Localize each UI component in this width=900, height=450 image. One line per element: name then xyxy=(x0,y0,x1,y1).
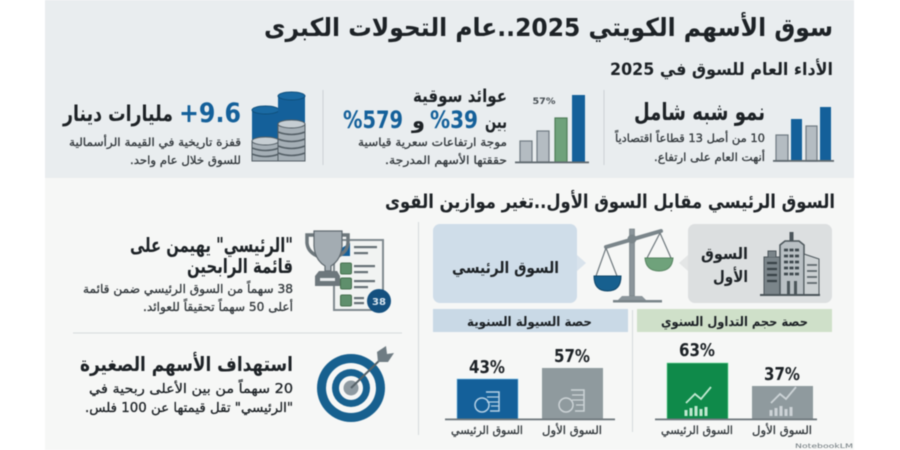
panel: main market box xyxy=(433,224,586,303)
text: winners description xyxy=(83,280,293,315)
text: winners description: 38 سهماً من السوق الرئيسي ضمن قائمة xyxy=(83,280,293,297)
panel: market cap gain xyxy=(62,92,305,168)
icon: buildings xyxy=(760,232,820,296)
text: small stocks description: "الرئيسي" تقل قيمتها عن 100 فلس. xyxy=(85,401,293,416)
text: market returns description: موجة ارتفاعات سعرية قياسية xyxy=(358,135,507,150)
figure: return range: %39 xyxy=(430,106,478,134)
label: main market: السوق الرئيسي xyxy=(451,423,523,438)
heading: main market dominates winners: "الرئيسي" يهيمن على xyxy=(130,233,293,258)
icon: trophy and checklist: 38 xyxy=(372,297,386,308)
icon: balance scale xyxy=(594,229,673,302)
bar: main market 43 percent: 43% xyxy=(469,357,505,378)
figure: 9.6 billion dinars xyxy=(62,98,241,129)
credit: NotebookLM: NotebookLM xyxy=(795,442,853,450)
label: first market: السوق الأول xyxy=(542,423,602,438)
figure: 9.6 billion dinars: مليارات دينار xyxy=(62,102,173,127)
title: سوق الأسهم الكويتي 2025..عام التحولات الكبرى xyxy=(264,12,833,43)
heading: near-total growth: نمو شبه شامل xyxy=(634,98,765,126)
text: market returns description: حققتها الأسهم المدرجة. xyxy=(385,153,507,168)
figure: return range xyxy=(343,106,507,134)
panel: near-total growth xyxy=(615,98,834,165)
text: market cap description: قفزة تاريخية في القيمة الرأسمالية xyxy=(69,134,241,150)
text: near-total growth description: أنهت العام على ارتفاع. xyxy=(654,149,765,165)
heading: market returns: عوائد سوقية xyxy=(413,86,507,107)
text: market returns description xyxy=(358,135,507,168)
heading: annual liquidity share xyxy=(433,309,628,332)
heading: annual trading volume share xyxy=(637,309,832,332)
text: near-total growth description xyxy=(615,129,765,165)
heading: main market dominates winners: قائمة الرابحين xyxy=(187,254,293,278)
panel: bottom comparison background xyxy=(45,178,854,450)
icon: growth bars xyxy=(773,107,834,162)
figure: 9.6 billion dinars: +9.6 xyxy=(179,98,241,129)
bar: first market 57 percent xyxy=(542,346,603,419)
label: main market: السوق الرئيسي xyxy=(452,258,559,278)
bar: first market 37 percent: 37% xyxy=(764,364,800,385)
figure: return range: و xyxy=(411,109,425,133)
panel: annual trading volume share xyxy=(637,309,832,438)
heading: overall performance: الأداء العام للسوق في 2025 xyxy=(610,59,833,80)
label: first market xyxy=(701,244,748,286)
text: near-total growth description: 10 من أصل 13 قطاعاً اقتصادياً xyxy=(615,129,765,146)
bar: first market 57 percent: 57% xyxy=(554,346,590,367)
panel: small stocks xyxy=(80,346,394,422)
bar: main market 43 percent xyxy=(457,357,518,419)
bar: first market 37 percent xyxy=(752,364,813,419)
figure: return range: %579 xyxy=(343,106,403,134)
text: market cap description: للسوق خلال عام واحد. xyxy=(130,153,241,168)
bar: main market 63 percent xyxy=(667,340,728,419)
panel: top overview background xyxy=(45,0,854,178)
heading: main market dominates winners xyxy=(130,233,293,278)
heading: targeting small stocks: استهداف الأسهم الصغيرة xyxy=(80,351,293,376)
panel: first market box xyxy=(679,224,832,303)
icon: target with arrow xyxy=(317,346,394,422)
figure: return range: بين xyxy=(485,111,507,133)
panel: winners list xyxy=(83,231,391,315)
text: small stocks description xyxy=(85,379,293,416)
icon: rising bars with 57 percent xyxy=(515,95,589,163)
heading: main versus first market: السوق الرئيسي مقابل السوق الأول..تغير موازين القوى xyxy=(385,190,835,213)
label: first market: السوق xyxy=(701,244,748,263)
icon: trophy and checklist xyxy=(307,231,391,313)
heading: annual liquidity share: حصة السيولة السنوية xyxy=(467,315,592,330)
text: market cap description xyxy=(69,134,241,168)
panel: market returns xyxy=(343,86,589,168)
icon: coin stacks xyxy=(252,92,305,161)
icon: rising bars with 57 percent: 57% xyxy=(532,97,556,107)
bar: main market 63 percent: 63% xyxy=(679,340,715,361)
label: main market: السوق الرئيسي xyxy=(661,423,733,438)
label: first market: الأول xyxy=(713,267,748,286)
text: small stocks description: 20 سهماً من بين الأعلى ربحية في xyxy=(89,379,293,397)
text: winners description: أعلى 50 سهماً تحقيقاً للعوائد. xyxy=(143,298,293,315)
heading: annual trading volume share: حصة حجم التداول السنوي xyxy=(661,315,808,330)
panel: annual liquidity share xyxy=(433,309,628,438)
label: first market: السوق الأول xyxy=(752,423,812,438)
